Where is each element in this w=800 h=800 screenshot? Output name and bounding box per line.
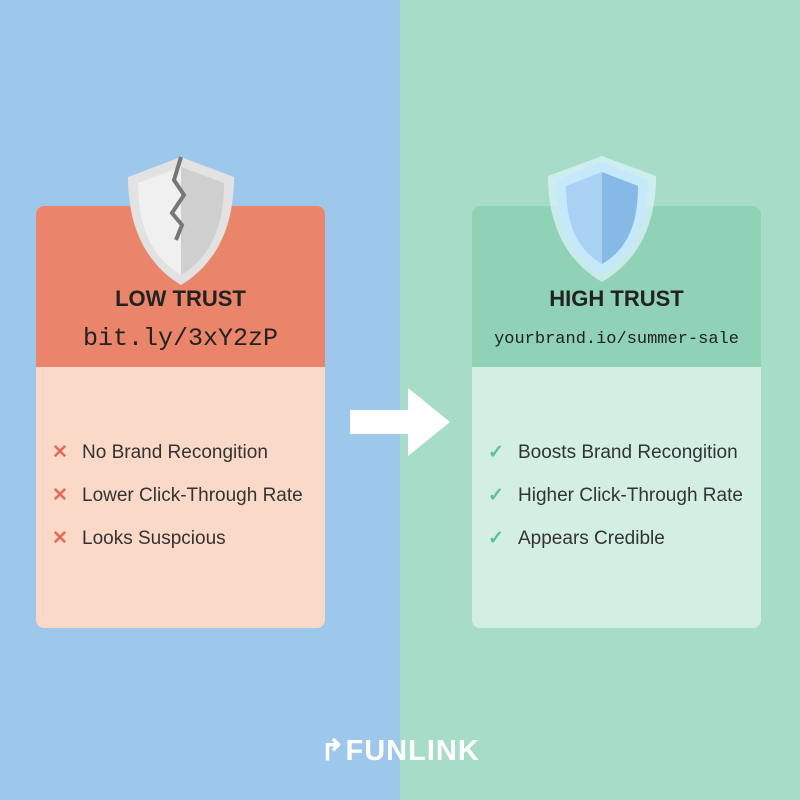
list: drawbacks: Lower Click-Through Rate [82,485,303,506]
list: drawbacks: ✕ [52,528,68,549]
list: benefits [488,442,743,549]
icon: cracked shield [128,156,234,285]
list: benefits: ✓ [488,528,504,549]
panel: low trust [36,206,325,628]
url: short link: bit.ly/3xY2zP [83,324,278,353]
list: drawbacks [52,442,303,549]
url: branded link: yourbrand.io/summer-sale [494,330,739,349]
list: benefits: ✓ [488,442,504,463]
logo: ↱FUNLINK [320,735,480,767]
title: high trust: HIGH TRUST [549,286,684,311]
title: low trust: LOW TRUST [115,286,246,311]
panel: high trust [472,206,761,628]
arrow [350,388,450,456]
list: drawbacks: ✕ [52,442,68,463]
header: high trust [472,206,761,367]
icon: glowing shield [548,156,656,282]
list: benefits: Boosts Brand Recongition [518,442,738,463]
list: drawbacks: No Brand Recongition [82,442,268,463]
list: benefits: Higher Click-Through Rate [518,485,743,506]
list: benefits: ✓ [488,485,504,506]
list: benefits: Appears Credible [518,528,665,549]
header: low trust [36,206,325,367]
list: drawbacks: Looks Suspcious [82,528,226,549]
list: drawbacks: ✕ [52,485,68,506]
